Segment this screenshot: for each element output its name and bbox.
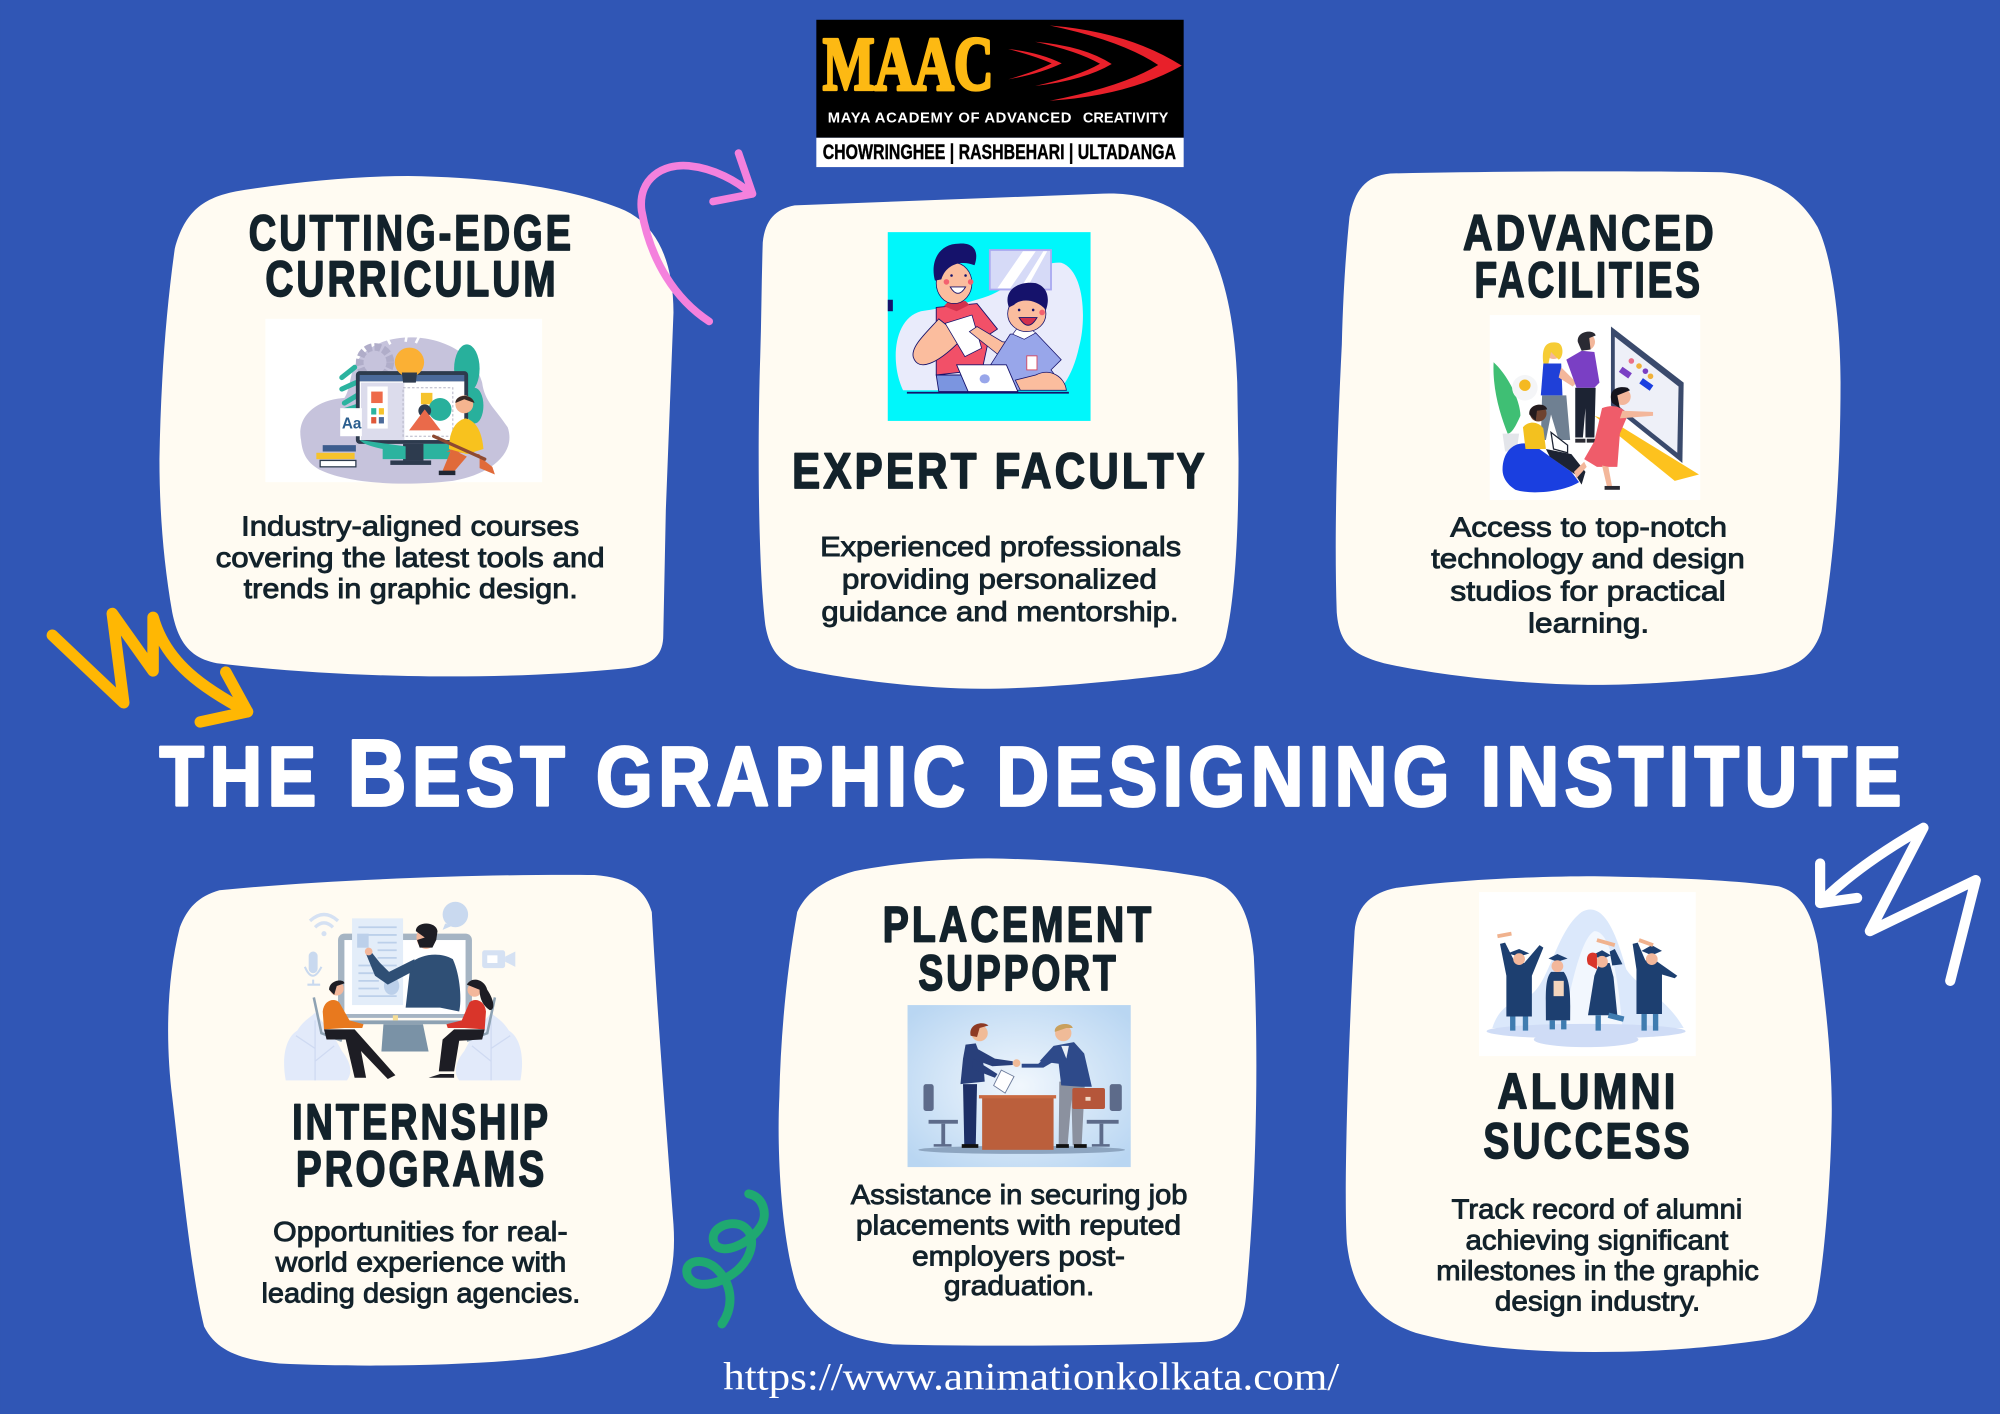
table bbox=[346, 1020, 464, 1024]
logo: MAAC: CREATIVITY bbox=[1083, 110, 1168, 126]
heading bbox=[249, 205, 574, 307]
description: covering the latest tools and bbox=[216, 542, 605, 573]
description: guidance and mentorship. bbox=[821, 596, 1179, 627]
description: Track record of alumni bbox=[1452, 1194, 1742, 1225]
left man bbox=[963, 1084, 977, 1145]
illustration: four graduates bbox=[1479, 892, 1696, 1056]
description bbox=[216, 511, 605, 604]
illustration: team at touch board bbox=[1490, 315, 1700, 500]
description: providing personalized bbox=[842, 564, 1157, 595]
teacher bbox=[936, 375, 969, 392]
panel: expert faculty bbox=[759, 193, 1239, 689]
illustration: designer at monitor: Aa bbox=[342, 416, 362, 433]
description bbox=[261, 1216, 580, 1308]
laptop bbox=[957, 365, 1018, 392]
heading bbox=[1483, 1063, 1693, 1169]
description bbox=[851, 1179, 1187, 1301]
right attendee bbox=[467, 997, 495, 1041]
illustration: designer at monitor bbox=[265, 319, 542, 484]
heading bbox=[292, 1094, 551, 1197]
presenter bbox=[406, 955, 460, 1011]
heading: CURRICULUM bbox=[265, 251, 559, 307]
description: graduation. bbox=[944, 1270, 1094, 1301]
logo tagline: MAYA ACADEMY OF ADVANCED bbox=[828, 110, 1072, 126]
panel: placement support bbox=[779, 858, 1256, 1346]
panel: alumni success bbox=[1346, 876, 1832, 1352]
heading: ADVANCED bbox=[1463, 205, 1717, 261]
graduate 3 bbox=[1588, 963, 1617, 1015]
description: Opportunities for real- bbox=[273, 1216, 568, 1247]
description: design industry. bbox=[1495, 1286, 1700, 1317]
description: leading design agencies. bbox=[261, 1277, 580, 1308]
description: world experience with bbox=[274, 1247, 566, 1278]
graduate 1 bbox=[1500, 943, 1543, 1017]
illustration: handshake over a desk bbox=[908, 1005, 1131, 1167]
heading bbox=[883, 896, 1154, 1001]
description bbox=[1436, 1194, 1759, 1317]
blonde woman bbox=[1541, 395, 1570, 440]
description: Assistance in securing job bbox=[851, 1179, 1187, 1210]
heading: PROGRAMS bbox=[296, 1141, 547, 1197]
chairs bbox=[923, 1084, 1122, 1147]
logo chevrons bbox=[1008, 26, 1182, 101]
description: Industry-aligned courses bbox=[241, 511, 579, 542]
heading: SUCCESS bbox=[1483, 1113, 1693, 1169]
icons: wifi, mic, chat, camera bbox=[310, 915, 338, 927]
heading: FACILITIES bbox=[1474, 252, 1703, 308]
heading: PLACEMENT bbox=[883, 896, 1154, 952]
website url: https://www.animationkolkata.com/ bbox=[723, 1355, 1339, 1399]
description: placements with reputed bbox=[856, 1210, 1181, 1241]
panel: advanced facilities bbox=[1336, 171, 1841, 685]
arrow: white zigzag bbox=[1820, 828, 1976, 981]
desk bbox=[979, 1095, 1056, 1098]
woman in pink dress bbox=[1584, 406, 1628, 467]
graduate 2 bbox=[1546, 972, 1570, 1020]
description: studios for practical bbox=[1450, 576, 1726, 607]
description bbox=[1431, 511, 1745, 639]
arrow: yellow zigzag bbox=[52, 614, 247, 722]
description: technology and design bbox=[1431, 543, 1745, 574]
bean bag and seated man bbox=[1503, 443, 1579, 492]
graduate 4 bbox=[1633, 943, 1677, 1014]
heading bbox=[1463, 205, 1717, 308]
description: employers post- bbox=[912, 1240, 1125, 1271]
man in purple bbox=[1575, 388, 1596, 437]
left attendee bbox=[314, 997, 342, 1041]
student bbox=[990, 333, 1066, 390]
handshake bbox=[1013, 1059, 1020, 1067]
logo wordmark: MAAC bbox=[823, 21, 994, 106]
description: learning. bbox=[1528, 608, 1649, 639]
heading: EXPERT FACULTY bbox=[792, 443, 1208, 499]
heading: SUPPORT bbox=[918, 945, 1119, 1001]
right man bbox=[1059, 1082, 1085, 1145]
panel: cutting-edge curriculum bbox=[159, 176, 673, 676]
arrow: pink curved bbox=[641, 153, 753, 321]
decoration: green squiggle bbox=[687, 1194, 764, 1324]
description: milestones in the graphic bbox=[1436, 1255, 1759, 1286]
text card bbox=[340, 408, 362, 436]
illustration: online class meeting bbox=[284, 902, 522, 1080]
books bbox=[323, 445, 356, 452]
description: trends in graphic design. bbox=[244, 573, 578, 604]
illustration: two faculty members with laptop bbox=[888, 232, 1091, 421]
description: Access to top-notch bbox=[1450, 511, 1727, 542]
clipboard bbox=[994, 1070, 1014, 1093]
description: Experienced professionals bbox=[820, 531, 1181, 562]
briefcase bbox=[1072, 1088, 1105, 1109]
logo locations: CHOWRINGHEE | RASHBEHARI | ULTADANGA bbox=[823, 141, 1176, 164]
logo: MAAC bbox=[816, 20, 1184, 167]
description: achieving significant bbox=[1466, 1224, 1729, 1255]
heading: CUTTING-EDGE bbox=[249, 205, 574, 261]
panel: internship programs bbox=[168, 875, 674, 1366]
description bbox=[820, 531, 1181, 627]
heading: ALUMNI bbox=[1497, 1063, 1679, 1119]
heading: INTERNSHIP bbox=[292, 1094, 551, 1150]
person bbox=[446, 446, 495, 474]
